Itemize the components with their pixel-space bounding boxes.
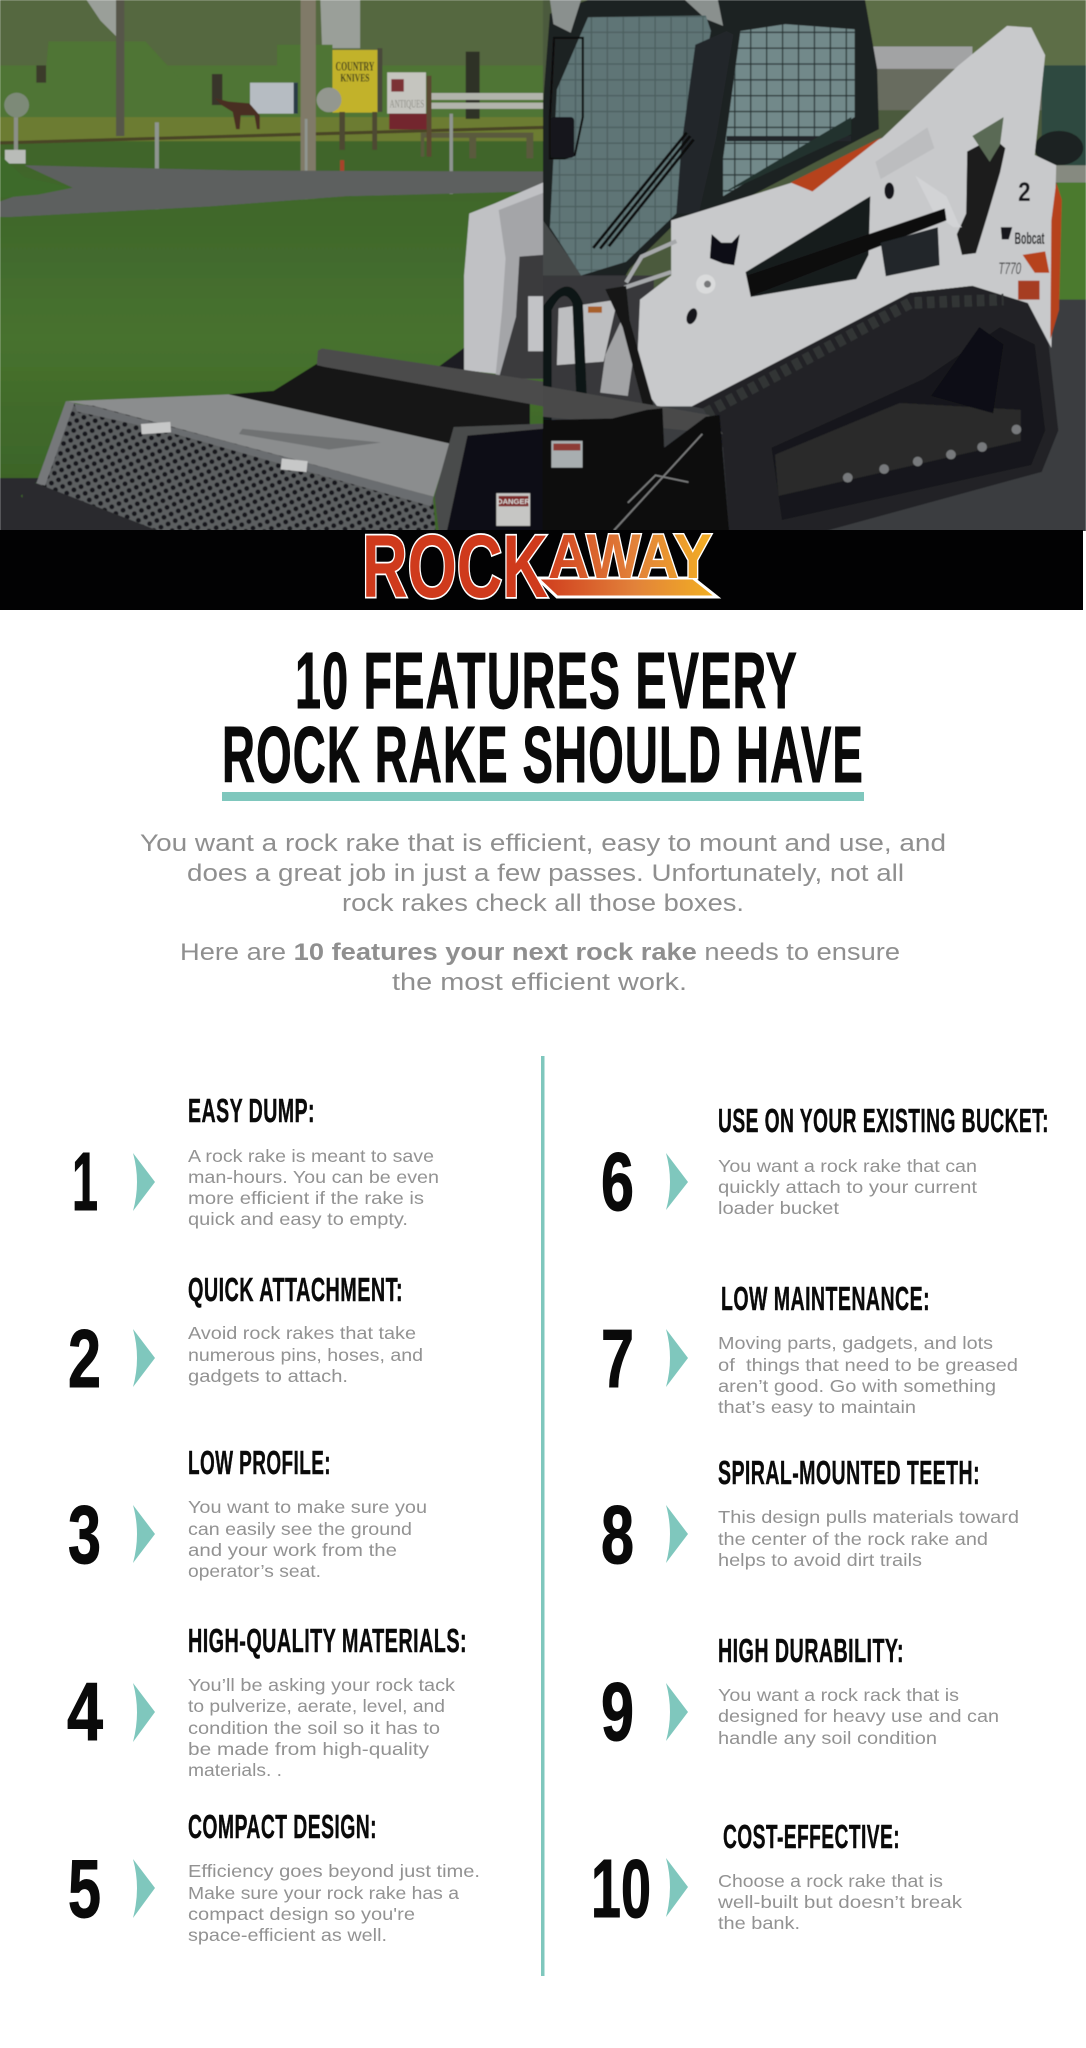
cab shell (543, 0, 879, 281)
decals (998, 177, 1049, 300)
feature 1: easy dump: 1 (72, 1135, 98, 1228)
body 5: Efficiency goes beyond just time. (188, 1861, 480, 1881)
rake: top rail (317, 349, 543, 406)
engine grill (881, 227, 940, 276)
decals: T770 (998, 259, 1022, 278)
rake: front lip (22, 483, 155, 530)
arrow 8 (666, 1505, 688, 1563)
foreground grass (0, 216, 543, 381)
machine nose below cab (542, 275, 654, 386)
body 1: more efficient if the rake is (188, 1188, 424, 1208)
body 4 (188, 1675, 455, 1780)
feature 10: cost-effective (591, 1819, 962, 1935)
body 6: loader bucket (718, 1198, 839, 1218)
asphalt (0, 478, 50, 530)
machine left panel (464, 183, 543, 379)
orange rear panel (1050, 183, 1062, 339)
wipers (593, 133, 694, 249)
cab glass and mesh (550, 15, 711, 276)
signs (250, 48, 431, 157)
body 5: compact design so you're (188, 1904, 415, 1924)
white loader body (637, 26, 1056, 406)
lift pipe (872, 46, 972, 69)
feature 5: compact design: 5 (68, 1842, 101, 1935)
body 6: You want a rock rake that can (718, 1156, 977, 1176)
danger sticker (496, 493, 531, 526)
intro text: Here are 10 features your next rock rake needs to ensure (180, 939, 900, 966)
decals: 2 (1018, 177, 1031, 207)
body 4: be made from high-quality (188, 1739, 429, 1759)
body 7 (718, 1333, 1018, 1417)
arrow 9 (666, 1683, 688, 1741)
body 3: You want to make sure you (188, 1497, 427, 1517)
body 5: space-efficient as well. (188, 1925, 387, 1945)
arrow 6 (666, 1153, 688, 1210)
road (0, 165, 543, 218)
body 5: Make sure your rock rake has a (188, 1883, 459, 1903)
mirror (550, 38, 583, 158)
rake: mount box (435, 424, 543, 540)
feature 9: high durability (601, 1633, 999, 1758)
body 6: quickly attach to your current (718, 1177, 977, 1197)
decals: Bobcat (1015, 229, 1045, 248)
body 10: the bank. (718, 1913, 800, 1933)
feature 1: easy dump: EASY DUMP: (188, 1093, 315, 1130)
rake: perforated face (36, 403, 436, 540)
feature 5: compact design (68, 1809, 480, 1945)
body 4: condition the soil so it has to (188, 1718, 440, 1738)
body 9: designed for heavy use and can (718, 1706, 999, 1726)
body 8: the center of the rock rake and (718, 1529, 988, 1549)
body 3: and your work from the (188, 1540, 397, 1560)
photo right half: loader body and track (543, 0, 1086, 540)
body 2: gadgets to attach. (188, 1366, 348, 1386)
bolt holes (686, 183, 894, 324)
body 3: operator’s seat. (188, 1561, 321, 1581)
feature 4: high-quality materials: HIGH-QUALITY MATERIALS: (188, 1623, 467, 1660)
feature 6: use on your existing bucket (601, 1103, 1049, 1228)
body 10: well-built but doesn’t break (717, 1892, 962, 1912)
feature 3: low profile: LOW PROFILE: (188, 1445, 331, 1482)
feature 5: compact design: COMPACT DESIGN: (188, 1809, 377, 1846)
feature 7: low maintenance: 7 (601, 1312, 634, 1405)
body 4: materials. . (188, 1760, 282, 1780)
body 7: of things that need to be greased (718, 1355, 1018, 1375)
rollers (843, 425, 1021, 483)
feature 1: easy dump (72, 1093, 439, 1229)
body 8: This design pulls materials toward (718, 1507, 1019, 1527)
orange arm stripe (791, 137, 882, 191)
rake mount (543, 386, 723, 434)
feature 4: high-quality materials: 4 (67, 1665, 103, 1758)
feature 2: quick attachment (68, 1272, 423, 1405)
title underline (222, 792, 864, 801)
dark side slot and strut (746, 196, 870, 297)
feature 2: quick attachment: QUICK ATTACHMENT: (188, 1272, 403, 1309)
danger sticker: DANGER (497, 497, 531, 506)
signs: KNIVES (340, 71, 370, 84)
body 4: to pulverize, aerate, level, and (188, 1696, 445, 1716)
body 1: man-hours. You can be even (188, 1167, 439, 1187)
body 6 (718, 1156, 977, 1218)
body 1: quick and easy to empty. (188, 1209, 408, 1229)
body 9: handle any soil condition (718, 1728, 937, 1748)
body 5 (188, 1861, 480, 1945)
sky patches (87, 0, 360, 48)
feature 4: high-quality materials (67, 1623, 467, 1780)
feature 10: cost-effective: 10 (591, 1842, 651, 1935)
body 1: A rock rake is meant to save (188, 1146, 434, 1166)
body 8: helps to avoid dirt trails (718, 1550, 922, 1570)
signs: ANTIQUES (390, 97, 424, 110)
feature 2: quick attachment: 2 (68, 1312, 101, 1405)
intro text: rock rakes check all those boxes. (342, 890, 744, 917)
arrow 5 (133, 1859, 155, 1918)
body 7: aren’t good. Go with something (718, 1376, 996, 1396)
feature 7: low maintenance: LOW MAINTENANCE: (721, 1281, 930, 1318)
signs: COUNTRY (336, 59, 375, 74)
body 9: You want a rock rack that is (718, 1685, 959, 1705)
photo left half: field, signs and rake (0, 0, 543, 540)
hero photo: track loader with rock rake (0, 0, 1086, 540)
feature 3: low profile: 3 (68, 1488, 101, 1581)
body 9 (718, 1685, 999, 1748)
body 2: numerous pins, hoses, and (188, 1345, 423, 1365)
hydraulic hoses (624, 241, 676, 288)
body 10 (717, 1871, 962, 1933)
arrow 7 (666, 1329, 688, 1387)
body 10: Choose a rock rake that is (718, 1871, 943, 1891)
decal on mount (551, 441, 582, 468)
body 7: Moving parts, gadgets, and lots (718, 1333, 993, 1353)
feature 9: high durability: 9 (601, 1665, 634, 1758)
horse (215, 98, 260, 129)
body 7: that’s easy to maintain (718, 1397, 916, 1417)
title (222, 636, 864, 799)
arrow 1 (133, 1153, 155, 1211)
intro text: the most efficient work. (392, 969, 687, 996)
arrow 2 (133, 1329, 155, 1387)
Rockaway logo: ROCK (362, 516, 548, 616)
Rockaway logo: AWAY (548, 522, 712, 592)
arrow 4 (133, 1683, 155, 1742)
rubber track (692, 286, 1058, 540)
body 2 (188, 1323, 423, 1386)
body 4: You’ll be asking your rock tack (188, 1675, 455, 1695)
arrow 3 (133, 1505, 155, 1563)
intro text (140, 830, 946, 996)
feature 8: spiral-mounted teeth: 8 (601, 1488, 634, 1581)
body 8 (718, 1507, 1019, 1570)
center divider (541, 1056, 544, 1976)
feature 7: low maintenance (601, 1281, 1018, 1417)
intro text: does a great job in just a few passes. Unfortunately, not all (187, 860, 904, 887)
intro text: You want a rock rake that is efficient, easy to mount and use, and (140, 830, 946, 857)
bobcat cat logo (710, 234, 740, 265)
logo band (0, 516, 1083, 616)
rake: bucket interior (229, 362, 530, 444)
body 2: Avoid rock rakes that take (188, 1323, 416, 1343)
arrow 10 (666, 1858, 688, 1917)
feature 8: spiral-mounted teeth (601, 1455, 1019, 1581)
feature 10: cost-effective: COST-EFFECTIVE: (723, 1819, 900, 1856)
feature 9: high durability: HIGH DURABILITY: (718, 1633, 904, 1670)
feature 3: low profile (68, 1445, 427, 1581)
body 1 (188, 1146, 439, 1229)
opening behind lift arm (957, 138, 1005, 255)
body 3 (188, 1497, 427, 1581)
body 3: can easily see the ground (188, 1519, 412, 1539)
rake: top plate (66, 394, 450, 497)
feature 6: use on your existing bucket: 6 (601, 1135, 634, 1228)
